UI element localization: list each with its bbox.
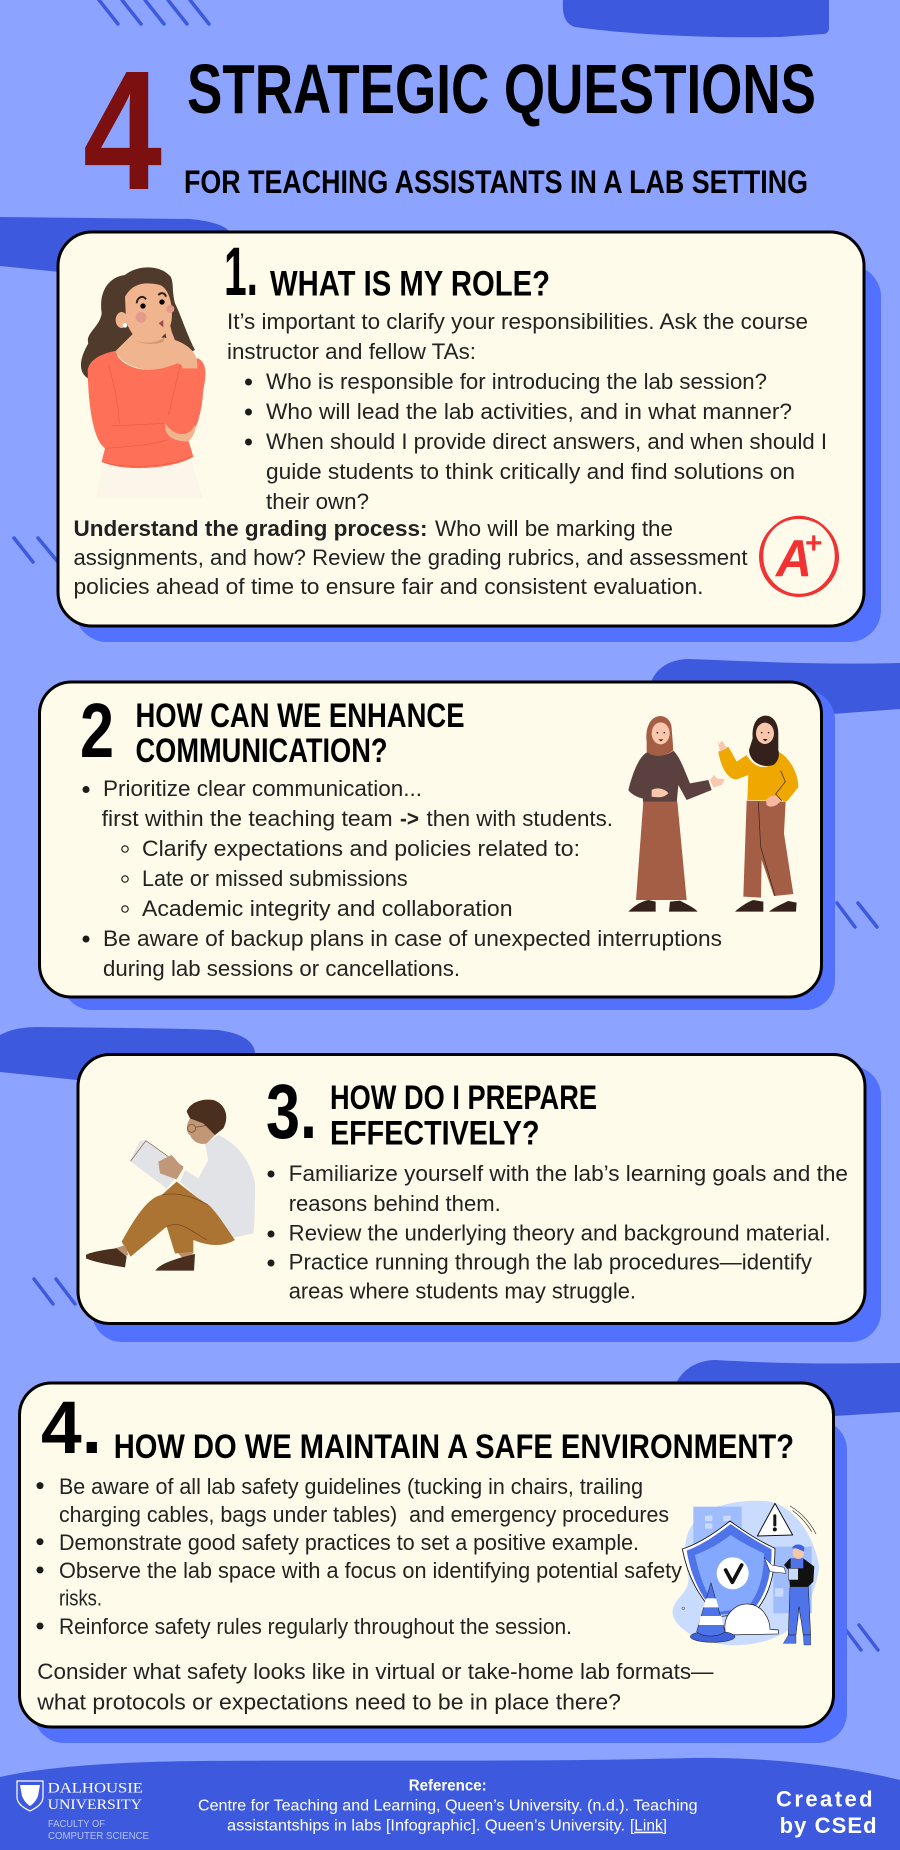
panel: question 2 (40, 682, 835, 1010)
panel: question 1 (58, 232, 881, 642)
closing question text: Consider what safety looks like in virtual or take-home lab formats— (37, 1659, 714, 1684)
bullet list: communication: during lab sessions or cancellations. (103, 956, 460, 981)
bullet list: preparation: Review the underlying theory and background material. (289, 1220, 831, 1246)
bullet list: communication: -> (400, 806, 419, 831)
icon: thinking woman (81, 267, 205, 498)
card shadow (75, 265, 881, 642)
bullet list: role questions: Who will lead the lab activities, and in what manner? (266, 399, 792, 424)
bullet list: preparation: Practice running through the lab procedures—identify (289, 1250, 812, 1274)
decorative blob: left of card 3 (0, 1027, 255, 1080)
decorative hatch marks: right of card 2 (837, 903, 877, 927)
bullet list: safety (36, 1474, 682, 1639)
intro text (227, 309, 808, 364)
decorative hatch marks: top (99, 0, 209, 24)
bullet list: role questions: When should I provide direct answers, and when should I (266, 429, 827, 454)
heading: how can we enhance communication: COMMUNICATION? (136, 732, 388, 770)
logo: Dalhousie University: DALHOUSIE (48, 1781, 143, 1797)
grading process text: assignments, and how? Review the grading rubrics, and assessment (74, 545, 747, 570)
bullet list: role questions: guide students to think critically and find solutions on (266, 459, 795, 484)
bullet list: communication: first within the teaching team (102, 806, 393, 831)
logo: Dalhousie University (17, 1781, 149, 1842)
numeral 1: 1. (224, 233, 258, 310)
reference text: [Link] (630, 1818, 667, 1835)
card shadow (34, 1420, 847, 1743)
decorative blob: right of card 2 (649, 659, 900, 714)
decorative blob: top right (563, 0, 829, 37)
credit: by CSEd (780, 1813, 877, 1838)
reference text: Reference: (409, 1778, 487, 1795)
bullet list: safety: Reinforce safety rules regularly throughout the session. (59, 1614, 572, 1639)
numeral 4: 4. (41, 1386, 102, 1469)
intro text: It’s important to clarify your responsibilities. Ask the course (227, 309, 808, 334)
icon: A+ grade circle: A (774, 530, 812, 588)
icon: two women talking (628, 716, 798, 912)
bullet list: communication: Prioritize clear communication... (103, 776, 422, 801)
decorative blob: right of card 4 (674, 1360, 900, 1416)
bullet list: communication: Be aware of backup plans in case of unexpected interruptions (103, 926, 722, 951)
icon: A+ grade circle: + (805, 527, 823, 560)
closing question text (36, 1659, 714, 1714)
bullet list: communication: then with students. (426, 806, 613, 831)
bullet list: safety: Observe the lab space with a focus on identifying potential safety (59, 1558, 682, 1583)
card body (78, 1054, 865, 1324)
bullet list: communication: Clarify expectations and policies related to: (142, 836, 580, 861)
bullet list: preparation (268, 1161, 848, 1304)
grading process text: policies ahead of time to ensure fair and consistent evaluation. (74, 574, 704, 599)
icon: A+ grade circle (755, 513, 843, 601)
card body (40, 682, 822, 997)
card shadow (62, 690, 835, 1010)
card body (58, 232, 864, 626)
footer background (0, 1758, 900, 1850)
credit: Created (776, 1787, 873, 1812)
bullet list: safety: Be aware of all lab safety guidelines (tucking in chairs, trailing (59, 1474, 643, 1499)
logo: Dalhousie University: FACULTY OF (48, 1819, 105, 1830)
intro text: instructor and fellow TAs: (227, 339, 476, 364)
grading process text (74, 516, 747, 599)
heading: how do I prepare effectively (330, 1079, 597, 1152)
bullet list: communication (82, 776, 722, 981)
bullet list: preparation: areas where students may struggle. (289, 1278, 636, 1304)
bullet list: safety: risks. (59, 1586, 102, 1611)
footer band (0, 1758, 900, 1850)
bullet list: communication: Academic integrity and collaboration (142, 896, 513, 921)
card shadow (92, 1066, 881, 1342)
decorative hatch marks: left of card 1 (14, 538, 58, 562)
icon: student reading a book (86, 1100, 255, 1271)
closing question text: what protocols or expectations need to be in place there? (36, 1689, 621, 1714)
logo: Dalhousie University: COMPUTER SCIENCE (48, 1831, 149, 1842)
numeral 2: 2 (80, 688, 114, 774)
bullet list: role questions: Who is responsible for introducing the lab session? (266, 369, 767, 394)
card body (20, 1383, 834, 1727)
panel: question 3 (78, 1054, 881, 1342)
decorative hatch marks: right of card 4 (846, 1625, 878, 1650)
heading: how do I prepare effectively: EFFECTIVELY? (330, 1114, 540, 1152)
heading: how do we maintain a safe environment: HOW DO WE MAINTAIN A SAFE ENVIRONMENT? (114, 1428, 794, 1466)
credit (776, 1787, 877, 1838)
title (83, 36, 816, 226)
heading: how can we enhance communication (136, 697, 464, 770)
bullet list: communication: Late or missed submissions (142, 866, 408, 891)
heading: what is my role: WHAT IS MY ROLE? (270, 264, 550, 304)
panel: question 4 (20, 1383, 847, 1743)
bullet list: safety: Demonstrate good safety practices to set a positive example. (59, 1530, 639, 1555)
reference text: assistantships in labs [Infographic]. Queen’s University. (227, 1818, 625, 1835)
bullet list: preparation: Familiarize yourself with the lab’s learning goals and the (289, 1161, 848, 1186)
decorative hatch marks: left of card 3 (34, 1279, 75, 1304)
decorative blob: left of card 1 (0, 217, 230, 280)
grading process text: Who will be marking the (435, 516, 673, 541)
heading: how do I prepare effectively: HOW DO I PREPARE (330, 1079, 597, 1117)
reference text (198, 1778, 698, 1835)
heading: how can we enhance communication: HOW CAN WE ENHANCE (136, 697, 464, 735)
reference text: Centre for Teaching and Learning, Queen’s University. (n.d.). Teaching (198, 1798, 698, 1815)
bullet list: safety: charging cables, bags under tables) and emergency procedures (59, 1502, 669, 1527)
grading process text: Understand the grading process: (74, 516, 428, 541)
big numeral 4: 4 (83, 36, 162, 226)
bullet list: role questions (245, 369, 827, 514)
numeral 3: 3. (266, 1069, 317, 1155)
icon: safety shield with worker (672, 1501, 819, 1645)
bullet list: role questions: their own? (266, 489, 369, 514)
bullet list: preparation: reasons behind them. (289, 1191, 501, 1216)
logo: Dalhousie University: UNIVERSITY (48, 1797, 142, 1813)
